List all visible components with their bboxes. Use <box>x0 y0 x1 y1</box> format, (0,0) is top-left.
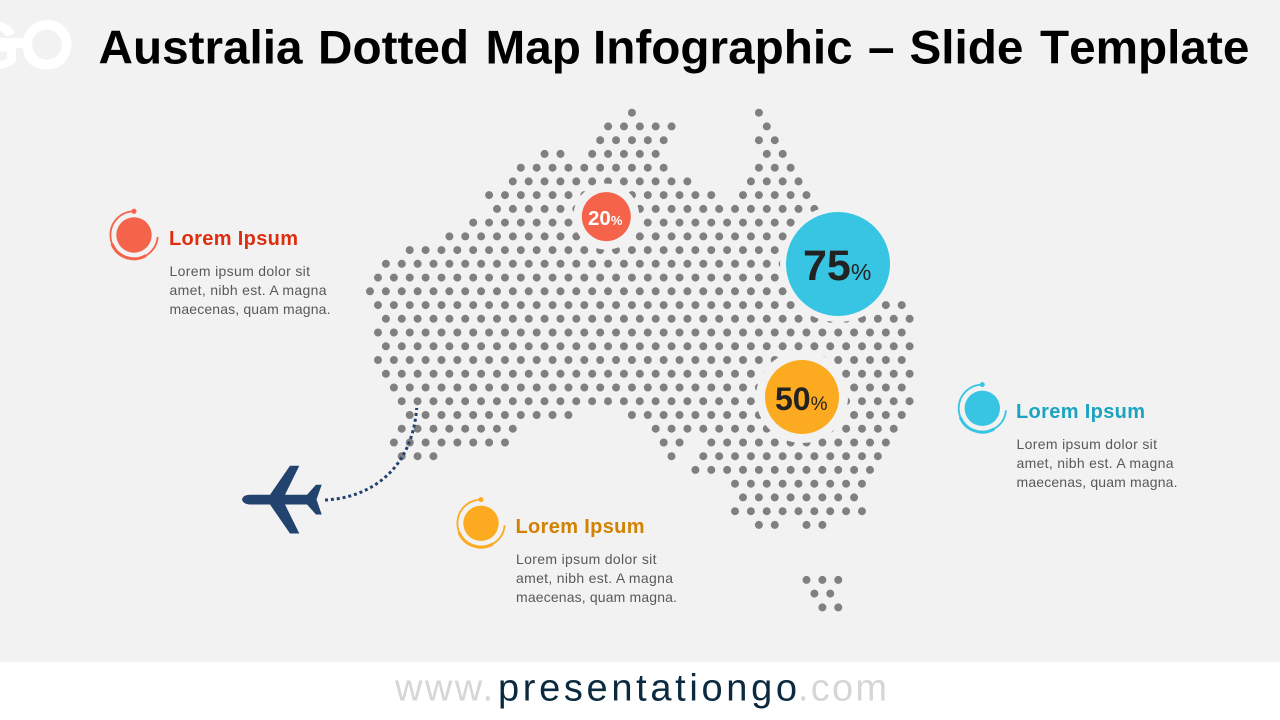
footer website address: www. <box>394 668 493 710</box>
body text: red callout: Lorem ipsum dolor sit <box>170 263 310 279</box>
body text: red callout: maecenas, quam magna. <box>170 301 330 317</box>
panel: red callout <box>110 209 330 317</box>
body text: blue callout: Lorem ipsum dolor sit <box>1016 436 1157 452</box>
panel: blue callout <box>959 382 1178 490</box>
dotted map of Australia <box>370 113 910 525</box>
body text: blue callout: maecenas, quam magna. <box>1016 474 1178 490</box>
icon: blue target <box>959 382 1006 432</box>
title: Template <box>1040 22 1249 74</box>
title: Dotted <box>318 22 469 74</box>
footer band <box>0 662 1280 720</box>
body text: blue callout <box>1016 436 1178 490</box>
title: Map <box>486 22 581 74</box>
body text: orange callout <box>516 551 677 605</box>
title: Infographic <box>593 22 853 74</box>
heading: orange callout: Lorem Ipsum <box>516 516 644 538</box>
dotted flight path arrow <box>325 408 417 500</box>
title: Slide <box>910 22 1023 74</box>
body text: red callout: amet, nibh est. A magna <box>170 282 327 298</box>
title: Australia <box>98 22 303 74</box>
icon: red target <box>110 209 158 259</box>
body text: red callout <box>170 263 330 317</box>
title: – <box>868 22 895 74</box>
bubble: 20 percent <box>573 184 639 250</box>
dotted map of Tasmania <box>806 580 839 607</box>
bubble: 50 percent: 50% <box>775 381 828 417</box>
body text: blue callout: amet, nibh est. A magna <box>1016 455 1174 471</box>
heading: blue callout: Lorem Ipsum <box>1016 401 1145 423</box>
icon: orange target <box>457 497 505 547</box>
bubble: 20 percent: 20% <box>588 207 623 230</box>
body text: orange callout: maecenas, quam magna. <box>516 589 677 605</box>
footer website address <box>394 668 887 710</box>
airplane icon <box>242 466 322 534</box>
heading: red callout: Lorem Ipsum <box>169 228 298 250</box>
footer website address: presentationgo <box>498 668 797 710</box>
panel: orange callout <box>457 497 677 605</box>
bubble: 75 percent: 75% <box>803 242 871 290</box>
body text: orange callout: Lorem ipsum dolor sit <box>516 551 657 567</box>
body text: orange callout: amet, nibh est. A magna <box>516 570 673 586</box>
bubble: 50 percent <box>756 351 848 443</box>
footer website address: .com <box>798 668 887 710</box>
bubble: 75 percent <box>780 206 896 322</box>
